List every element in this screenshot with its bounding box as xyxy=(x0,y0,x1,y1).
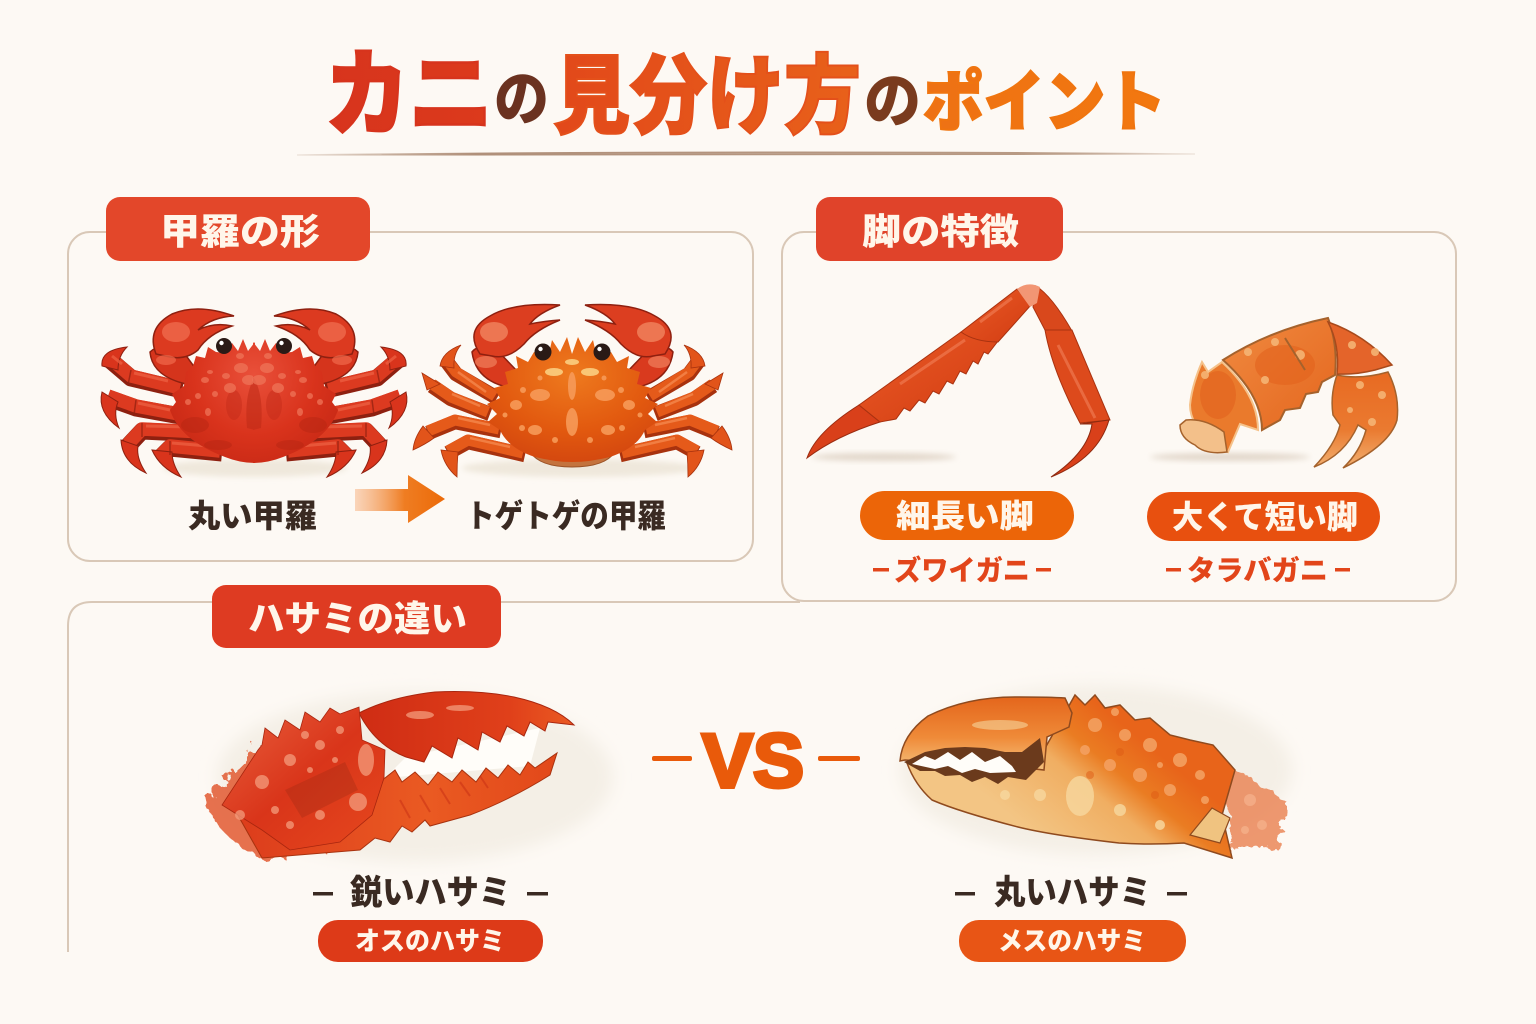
illustration: round claw xyxy=(900,685,1292,858)
pill: male claw: オスのハサミ xyxy=(355,926,505,956)
illustration: king crab leg xyxy=(1150,318,1398,468)
caption: snow crab: ズワイガニ xyxy=(894,554,1030,586)
panel frame xyxy=(68,602,800,952)
heading badge: ハサミの違い xyxy=(212,585,501,648)
label: spiky shell: トゲトゲの甲羅 xyxy=(466,498,666,534)
heading badge: 脚の特徴 xyxy=(816,197,1063,261)
panel frame xyxy=(68,232,753,561)
pill: big short legs: 大くて短い脚 xyxy=(1172,499,1358,535)
illustration: round-shell crab xyxy=(101,309,407,477)
title: カニ xyxy=(325,42,493,147)
arrow: round to spiky xyxy=(355,475,445,523)
pill: slender legs: 細長い脚 xyxy=(896,498,1034,534)
heading badge: 甲羅の形 xyxy=(106,197,370,261)
caption: king crab: タラバガニ xyxy=(1187,555,1328,586)
heading badge: ハサミの違い: ハサミの違い xyxy=(248,598,467,639)
title: ポイント xyxy=(923,65,1166,139)
VS separator xyxy=(652,719,860,804)
illustration: sharp claw xyxy=(206,692,613,862)
VS separator: VS xyxy=(702,719,804,804)
heading badge: 脚の特徴: 脚の特徴 xyxy=(862,211,1019,252)
pill: female claw xyxy=(959,920,1186,962)
panel: leg features xyxy=(782,197,1456,601)
illustration: snow crab leg xyxy=(807,284,1110,477)
title underline xyxy=(297,152,1195,155)
pill: slender legs xyxy=(860,491,1074,540)
pill: female claw: メスのハサミ xyxy=(998,926,1146,956)
panel: claw differences xyxy=(68,585,1292,962)
title xyxy=(325,42,1166,147)
title: の xyxy=(864,68,921,135)
label: sharp claw: 鋭いハサミ xyxy=(350,874,511,912)
label: round claw: 丸いハサミ xyxy=(994,874,1151,912)
illustration: spiky-shell crab xyxy=(413,304,732,477)
title: の xyxy=(494,66,549,133)
heading badge: 甲羅の形: 甲羅の形 xyxy=(160,211,320,252)
pill: big short legs xyxy=(1147,492,1380,541)
panel: carapace shape xyxy=(68,197,753,561)
panel frame xyxy=(782,232,1456,601)
label: round shell: 丸い甲羅 xyxy=(188,498,317,534)
pill: male claw xyxy=(318,920,543,962)
title: 見分け方 xyxy=(553,49,861,145)
